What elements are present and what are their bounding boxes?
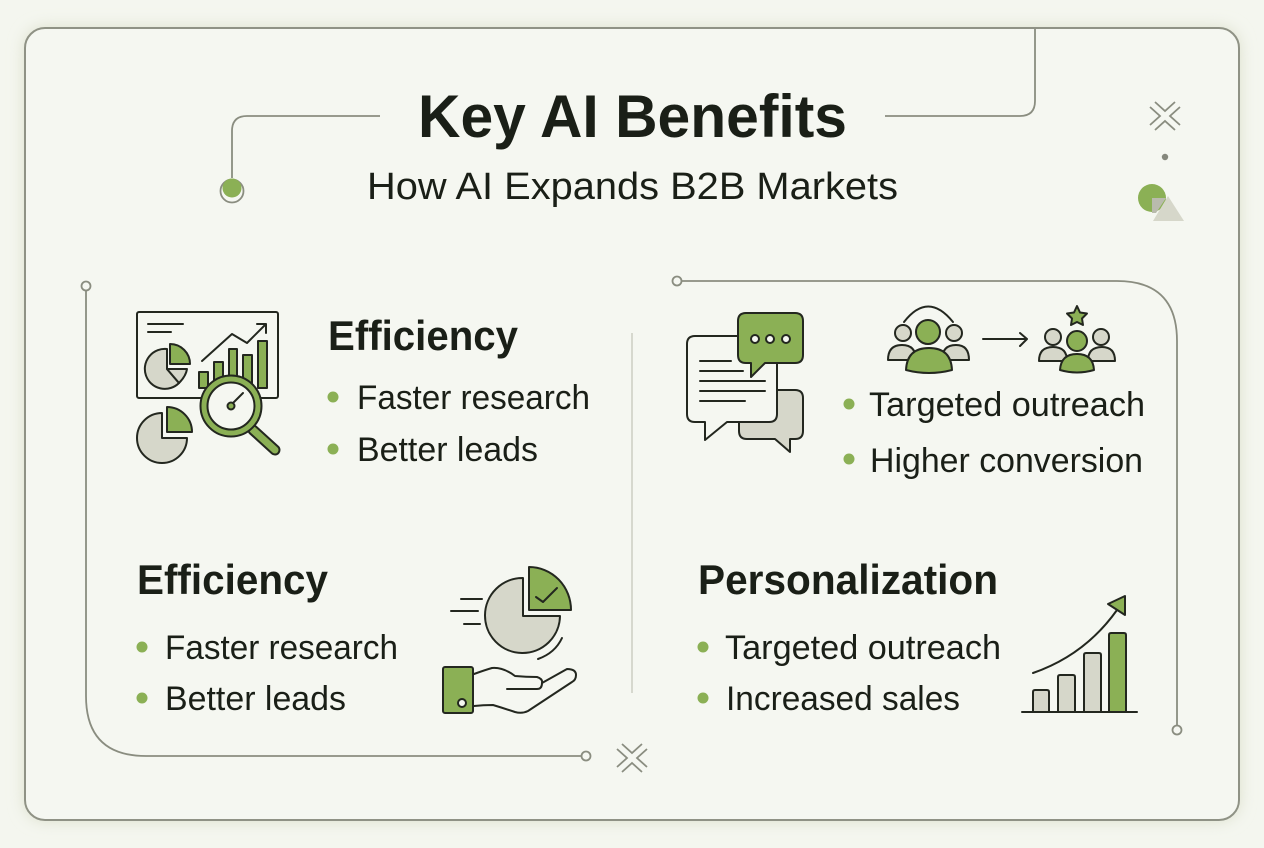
subtitle: How AI Expands B2B Markets — [367, 166, 898, 208]
panel: personalization top right — [687, 306, 1145, 480]
decoration: dot — [1162, 154, 1168, 160]
bullet: targeted outreach: Targeted outreach — [725, 629, 1001, 667]
icon: growth bar chart — [1022, 596, 1137, 712]
bullet: better leads: Better leads — [165, 680, 346, 718]
decoration: top right cross — [1150, 102, 1180, 130]
panel: efficiency top left — [137, 312, 590, 469]
heading: efficiency: Efficiency — [328, 312, 519, 359]
bullet: higher conversion: Higher conversion — [870, 442, 1143, 480]
icon: audience to targeted audience — [888, 306, 1115, 373]
bullet: better leads: Better leads — [357, 431, 538, 469]
icon: analytics dashboard with magnifier — [137, 312, 278, 463]
heading: efficiency: Efficiency — [137, 556, 329, 603]
icon: hand holding pie chart — [443, 567, 576, 713]
bullet: increased sales: Increased sales — [726, 680, 960, 718]
heading: personalization: Personalization — [698, 556, 998, 603]
icon: chat bubbles — [687, 313, 803, 452]
decoration: circle and triangle — [1138, 184, 1184, 221]
bullet: targeted outreach: Targeted outreach — [869, 386, 1145, 424]
connector: right frame — [672, 276, 1182, 734]
panel: personalization bottom right — [698, 556, 1137, 718]
bullet: faster research: Faster research — [165, 629, 398, 667]
bullet: faster research: Faster research — [357, 379, 590, 417]
title: Key AI Benefits — [418, 83, 847, 150]
connector: left frame — [82, 282, 590, 760]
panel: efficiency bottom left — [136, 556, 576, 718]
connector: title left to node — [220, 116, 380, 202]
connector: top right to title — [885, 29, 1035, 116]
decoration: bottom cross — [617, 744, 647, 772]
center divider — [631, 333, 633, 693]
